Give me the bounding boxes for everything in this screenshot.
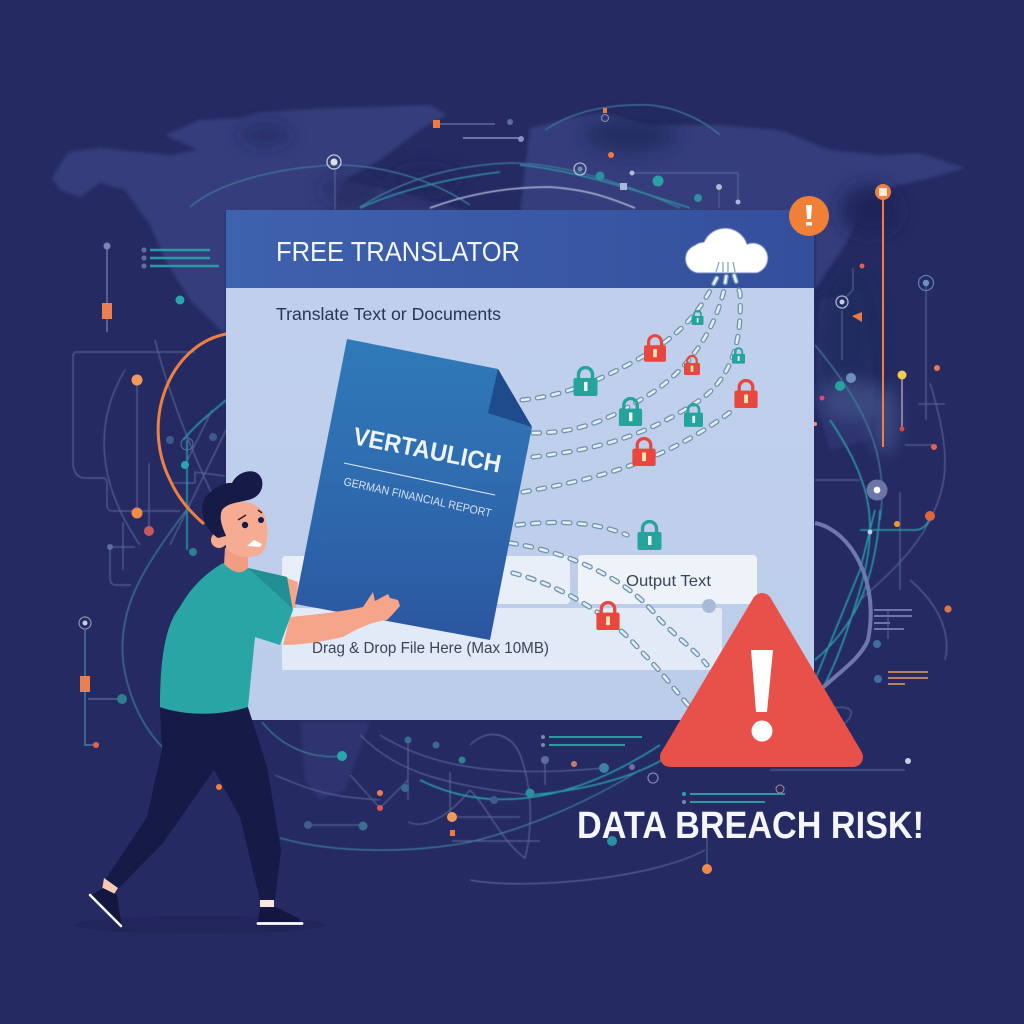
hair xyxy=(202,471,262,538)
head xyxy=(220,501,267,557)
padlocks xyxy=(574,311,758,630)
front sock and shoe xyxy=(260,900,274,909)
front arm and hand xyxy=(283,592,400,645)
main arcs xyxy=(122,105,882,850)
window header xyxy=(226,210,814,288)
white arc at window top xyxy=(430,187,635,208)
lower list lines xyxy=(541,735,785,804)
hub node xyxy=(866,480,888,500)
document subtitle: GERMAN FINANCIAL REPORT xyxy=(342,476,492,520)
ear xyxy=(211,532,227,548)
dark map patches xyxy=(240,117,900,410)
cloud icon xyxy=(686,228,768,273)
window title: FREE TRANSLATOR xyxy=(276,236,520,267)
back arm xyxy=(286,578,298,608)
headline: data breach risk: DATA BREACH RISK! xyxy=(577,805,924,847)
trousers xyxy=(105,704,281,900)
rear sock and shoe xyxy=(102,878,118,897)
subtitle: Translate Text or Documents xyxy=(276,304,501,324)
mouth xyxy=(247,540,262,547)
input text box xyxy=(282,556,570,604)
slate circuits xyxy=(73,168,947,884)
left list lines xyxy=(141,247,219,269)
slider dot xyxy=(702,599,716,613)
right list lines xyxy=(874,610,928,684)
left pin with orange tag xyxy=(102,242,112,332)
alert badge xyxy=(789,196,829,236)
teal bundles xyxy=(183,400,930,799)
document rule xyxy=(344,463,495,495)
map glow near right nodes xyxy=(822,378,899,455)
data chains xyxy=(510,272,740,705)
neck xyxy=(224,548,248,578)
warning triangle xyxy=(670,603,853,757)
world map backdrop xyxy=(52,105,965,800)
person carrying document xyxy=(90,471,302,927)
drop zone: Drag & Drop File Here (Max 10MB) xyxy=(312,640,549,657)
teal top bundle xyxy=(360,172,500,208)
app window panel xyxy=(226,210,814,720)
window body xyxy=(226,288,814,720)
top left connectors xyxy=(433,119,524,142)
yellow pin line xyxy=(898,370,906,431)
t-shirt xyxy=(160,563,293,714)
orange data line arc xyxy=(158,334,226,524)
network nodes xyxy=(107,108,952,874)
output text box: Output Text xyxy=(626,573,712,590)
folded corner xyxy=(488,369,532,427)
document title: VERTAULICH xyxy=(351,422,503,479)
left lower pin xyxy=(79,617,127,748)
drop zone xyxy=(282,608,722,670)
network lines background xyxy=(73,105,947,884)
floor shadow xyxy=(75,916,325,934)
output text box xyxy=(578,555,757,604)
orange pin line xyxy=(875,184,891,447)
grey ring xyxy=(815,523,871,695)
confidential document xyxy=(295,339,532,640)
eyes and brows xyxy=(238,510,262,520)
